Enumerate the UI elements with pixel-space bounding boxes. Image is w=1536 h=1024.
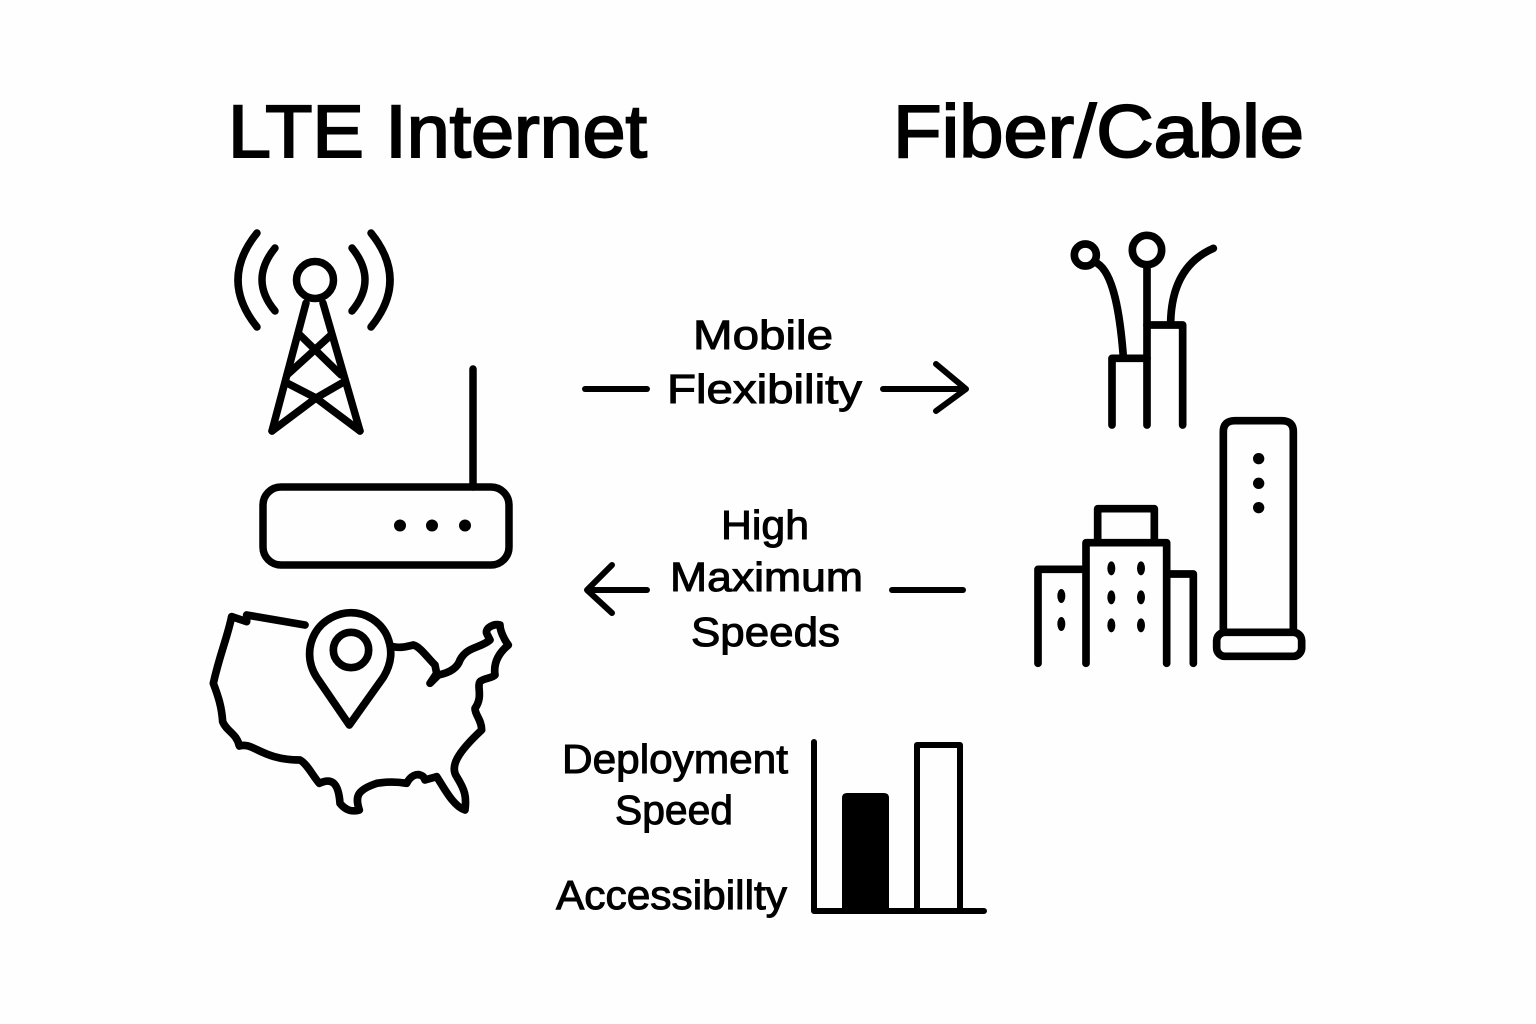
icon: cell tower (238, 233, 390, 431)
bar chart (814, 742, 984, 911)
label: High Maximum Speeds: Speeds (691, 609, 840, 655)
icon: city buildings (1038, 509, 1193, 663)
arrow: mobile flexibility toward fiber (585, 364, 966, 411)
icon: LTE router (263, 369, 509, 565)
heading: Fiber/Cable: Fiber/Cable (893, 90, 1304, 173)
arrow: high maximum speeds toward LTE (587, 565, 963, 613)
label: Mobile Flexibility: Flexibility (667, 366, 863, 412)
icon: US map with location pin (213, 613, 508, 811)
label: High Maximum Speeds (670, 502, 863, 655)
icon: fiber optic cables (1074, 235, 1213, 425)
label: Deployment Speed (562, 736, 789, 833)
label: Deployment Speed: Speed (615, 787, 733, 833)
outlined bar (917, 745, 960, 908)
label: Mobile Flexibility (667, 312, 863, 412)
label: Mobile Flexibility: Mobile (693, 312, 833, 358)
icon: cable modem (1217, 421, 1302, 656)
heading: LTE Internet: LTE Internet (228, 90, 647, 173)
filled bar (842, 793, 889, 911)
label: Deployment Speed: Deployment (562, 736, 789, 782)
label: High Maximum Speeds: High (721, 502, 809, 548)
label: Accessibillty: Accessibillty (556, 872, 788, 918)
label: High Maximum Speeds: Maximum (670, 554, 863, 600)
chart axes (814, 742, 984, 911)
